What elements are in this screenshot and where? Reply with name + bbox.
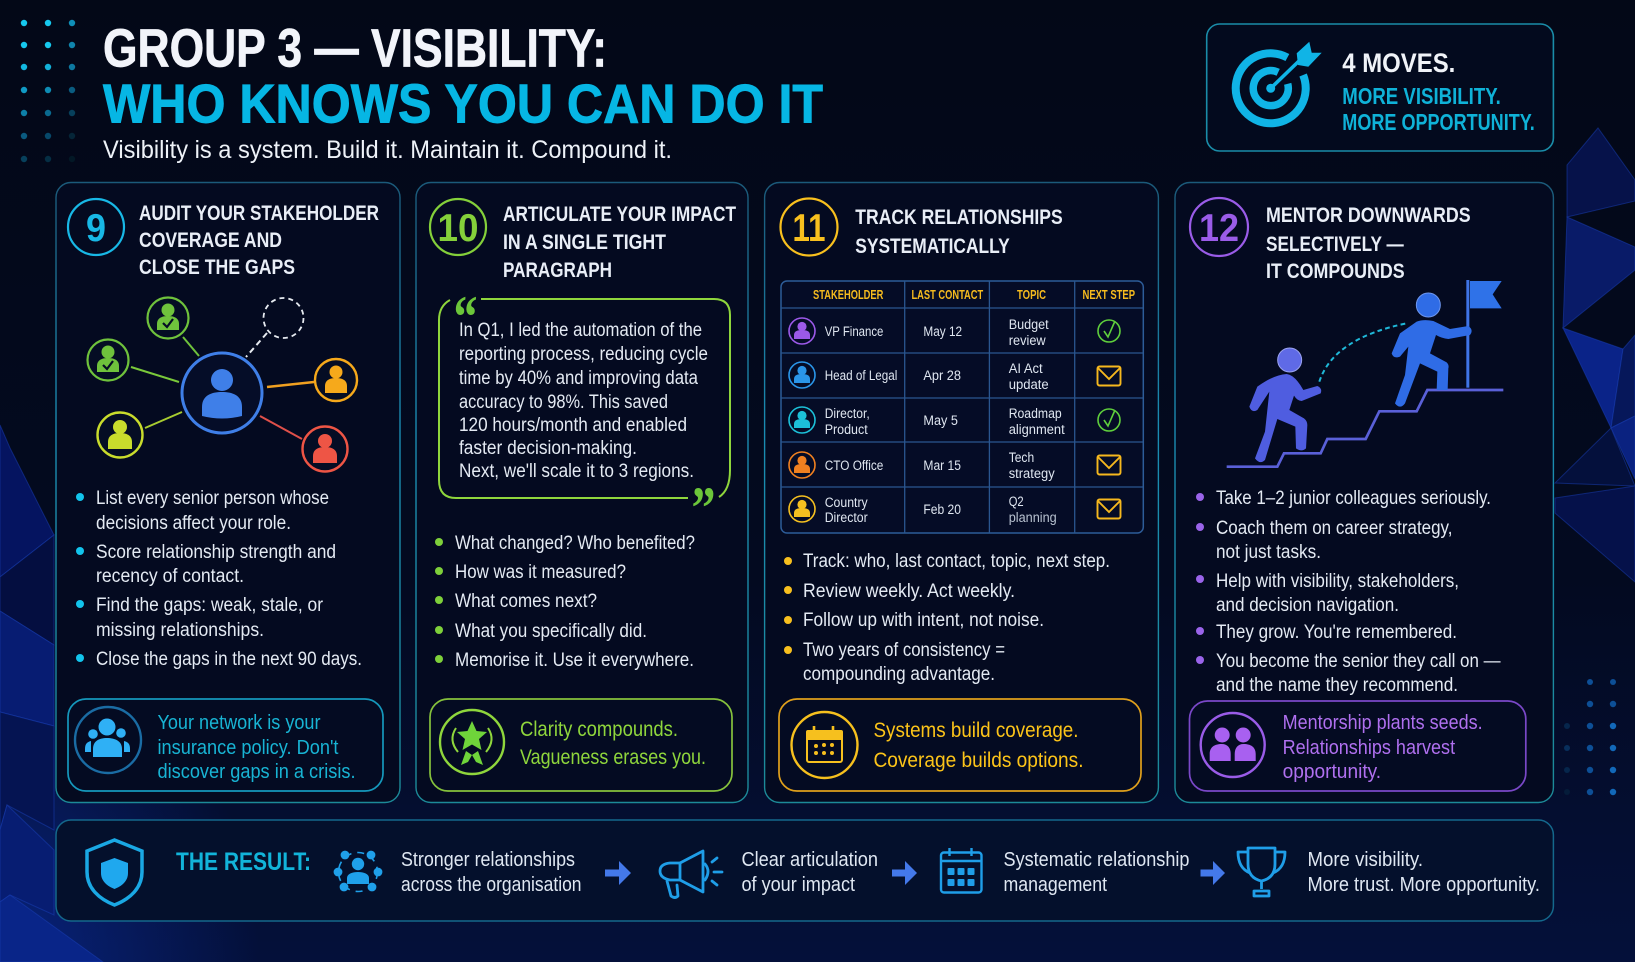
row: Director, Product: Product: [825, 422, 868, 437]
number badge 9: 9: [86, 207, 106, 250]
heading: [139, 202, 379, 279]
bullets: What you specifically did.: [455, 621, 647, 642]
bullets: What comes next?: [455, 591, 597, 612]
number badge 10: 10: [438, 207, 478, 250]
callout: 4 moves: MORE OPPORTUNITY.: [1342, 109, 1535, 135]
row: CTO Office: Tech: [1009, 450, 1034, 465]
subtitle: Visibility is a system. Build it. Maintain it. Compound it.: [103, 136, 672, 164]
row: Head of Legal: update: [1009, 377, 1049, 392]
opening quote mark: “: [454, 284, 478, 350]
icon: target with arrow: [1236, 42, 1322, 123]
icon: people: [75, 707, 141, 773]
stakeholder yellow: [98, 412, 142, 458]
stakeholder orange: [315, 359, 357, 401]
quote box: In Q1, I led the automation of the: [459, 320, 702, 341]
row: CTO Office: CTO Office: [825, 458, 883, 473]
row: VP Finance: VP Finance: [825, 324, 883, 339]
bullets: decisions affect your role.: [96, 513, 291, 534]
callout: mentorship: [1190, 701, 1526, 791]
heading: AUDIT YOUR STAKEHOLDER: [139, 202, 379, 225]
row: Director, Product: [789, 406, 1120, 437]
heading: CLOSE THE GAPS: [139, 256, 295, 279]
row: Country Director: Q2: [1009, 494, 1024, 509]
panel: move 11 track relationships: [765, 182, 1158, 802]
stairs: [1227, 390, 1503, 467]
stakeholder red: [302, 426, 348, 472]
junior figure: [1249, 348, 1321, 462]
table: relationship tracker: [781, 281, 1143, 533]
heading: IT COMPOUNDS: [1266, 260, 1405, 283]
row: Director, Product: Director,: [825, 406, 870, 421]
table header: LAST CONTACT: [912, 288, 983, 302]
row: Country Director: Director: [825, 510, 868, 525]
callout: 4 moves: 4 MOVES.: [1342, 48, 1455, 78]
callout: clarity: Vagueness erases you.: [520, 746, 706, 769]
bullets: What changed? Who benefited?: [455, 533, 695, 554]
heading: [503, 203, 736, 282]
quote box: time by 40% and improving data: [459, 368, 698, 389]
central person: [182, 353, 262, 433]
bullets: Score relationship strength and: [96, 542, 336, 563]
result text: management: Systematic relationship: [1004, 849, 1190, 871]
title: GROUP 3 — VISIBILITY:: [103, 18, 607, 78]
bullets: Memorise it. Use it everywhere.: [455, 650, 694, 671]
callout: systems: [779, 699, 1141, 791]
table header: STAKEHOLDER: [813, 288, 883, 302]
bullets: recency of contact.: [96, 566, 244, 587]
row: Country Director: [789, 494, 1120, 525]
number badge 12: 12: [1199, 207, 1239, 250]
quote box: faster decision-making.: [459, 438, 637, 459]
heading: MENTOR DOWNWARDS: [1266, 204, 1471, 227]
icon: two people: [1201, 713, 1265, 777]
senior figure: [1392, 293, 1472, 407]
bullets: Help with visibility, stakeholders,: [1216, 571, 1459, 592]
callout: network insurance: insurance policy. Don't: [158, 736, 339, 759]
callout: clarity: [430, 699, 732, 791]
heading: IN A SINGLE TIGHT: [503, 231, 666, 254]
result text: management: [1004, 849, 1190, 896]
arrow 3: [1200, 861, 1225, 885]
closing quote mark: ”: [692, 475, 716, 541]
icon: people network: [334, 851, 382, 892]
title: WHO KNOWS YOU CAN DO IT: [103, 72, 823, 134]
row: VP Finance: Budget: [1009, 317, 1049, 332]
row: VP Finance: May 12: [923, 324, 962, 339]
icon: trophy: [1238, 848, 1285, 896]
row: Head of Legal: Head of Legal: [825, 368, 897, 383]
quote box: accuracy to 98%. This saved: [459, 392, 668, 413]
result text: articulation: [742, 849, 878, 896]
bullets: Review weekly. Act weekly.: [803, 581, 1015, 602]
title: [103, 18, 823, 134]
bullets: not just tasks.: [1216, 542, 1321, 563]
panel: move 10 impact paragraph: [416, 182, 748, 802]
bullets: Follow up with intent, not noise.: [803, 610, 1044, 631]
bullets: [1196, 488, 1500, 696]
bullets: How was it measured?: [455, 562, 626, 583]
row: CTO Office: [789, 450, 1120, 481]
bullets: Close the gaps in the next 90 days.: [96, 649, 362, 670]
dashed arc: [1319, 323, 1407, 382]
row: Head of Legal: [789, 361, 1120, 392]
icon: calendar: [941, 848, 982, 892]
bullets: List every senior person whose: [96, 488, 329, 509]
heading: PARAGRAPH: [503, 259, 612, 282]
missing stakeholder: [264, 298, 304, 338]
callout: network insurance: Your network is your: [158, 711, 321, 734]
bullets: compounding advantage.: [803, 664, 995, 685]
row: Director, Product: Roadmap: [1009, 406, 1062, 421]
callout: network insurance: discover gaps in a crisis.: [158, 760, 356, 783]
panel: move 12 mentor downwards: [1175, 182, 1553, 802]
heading: ARTICULATE YOUR IMPACT: [503, 203, 736, 226]
result text: visibility: More visibility.: [1308, 849, 1423, 871]
flag: [1466, 280, 1502, 388]
quote box: 120 hours/month and enabled: [459, 415, 687, 436]
bullets: Two years of consistency =: [803, 640, 1005, 661]
quote box: [439, 284, 730, 541]
result text: articulation: Clear articulation: [742, 849, 878, 871]
row: Country Director: planning: [1009, 510, 1057, 525]
bullets: [435, 533, 695, 671]
result text: visibility: [1308, 849, 1540, 896]
result text: relationships: [401, 849, 582, 896]
callout: mentorship: opportunity.: [1283, 760, 1381, 783]
bullets: [76, 488, 362, 670]
result text: relationships: Stronger relationships: [401, 849, 575, 871]
row: VP Finance: review: [1009, 333, 1046, 348]
number badge 11: 11: [792, 207, 826, 250]
row: Director, Product: May 5: [923, 413, 958, 428]
panel: the result band: [56, 820, 1553, 921]
callout: network insurance: [68, 699, 383, 791]
heading: [855, 206, 1063, 258]
bullets: Coach them on career strategy,: [1216, 518, 1452, 539]
icon: shield: [87, 840, 142, 905]
icon: megaphone: [660, 851, 722, 898]
callout: mentorship: Mentorship plants seeds.: [1283, 711, 1483, 734]
row: Country Director: Feb 20: [923, 502, 961, 517]
bullets: Track: who, last contact, topic, next step.: [803, 551, 1110, 572]
stakeholder green 1: [148, 298, 188, 338]
bullets: Find the gaps: weak, stale, or: [96, 595, 324, 616]
bullets: Take 1–2 junior colleagues seriously.: [1216, 488, 1491, 509]
illustration: climbing stairs: [1227, 280, 1503, 467]
callout: systems: Systems build coverage.: [874, 719, 1078, 742]
heading: [1266, 204, 1471, 283]
row: CTO Office: Mar 15: [923, 458, 961, 473]
table header: [813, 288, 1135, 302]
number badge 9: [68, 199, 124, 255]
bullets: and the name they recommend.: [1216, 675, 1458, 696]
callout: 4 moves: MORE VISIBILITY.: [1342, 83, 1501, 109]
bullets: and decision navigation.: [1216, 595, 1399, 616]
bullets: They grow. You're remembered.: [1216, 622, 1457, 643]
heading: SELECTIVELY —: [1266, 233, 1404, 256]
callout: systems: Coverage builds options.: [874, 749, 1084, 772]
result label: THE RESULT:: [176, 848, 311, 876]
row: Head of Legal: Apr 28: [923, 368, 961, 383]
result text: management: management: [1004, 874, 1107, 896]
quote box: Next, we'll scale it to 3 regions.: [459, 461, 694, 482]
icon: award ribbon: [440, 710, 504, 774]
arrow 1: [605, 861, 631, 885]
result text: articulation: of your impact: [742, 874, 855, 896]
stakeholder green 2: [88, 340, 128, 380]
number badge 11: [780, 198, 838, 256]
bullets: missing relationships.: [96, 620, 264, 641]
number badge 12: [1190, 198, 1248, 256]
arrow 2: [892, 861, 917, 885]
heading: COVERAGE AND: [139, 229, 282, 252]
table header: TOPIC: [1017, 288, 1046, 302]
callout: 4 moves: [1207, 24, 1553, 151]
result text: relationships: across the organisation: [401, 874, 582, 896]
bullets: You become the senior they call on —: [1216, 651, 1500, 672]
panel: move 9 stakeholder coverage: [56, 182, 400, 802]
icon: calendar: [792, 712, 858, 778]
result text: visibility: More trust. More opportunity.: [1308, 874, 1540, 896]
row: Country Director: Country: [825, 495, 868, 510]
number badge 10: [430, 199, 486, 255]
callout: clarity: Clarity compounds.: [520, 718, 678, 741]
table header: NEXT STEP: [1082, 288, 1135, 302]
row: VP Finance: [789, 317, 1120, 348]
row: Head of Legal: AI Act: [1009, 361, 1043, 376]
row: CTO Office: strategy: [1009, 466, 1055, 481]
heading: TRACK RELATIONSHIPS: [855, 206, 1063, 229]
quote box: reporting process, reducing cycle: [459, 344, 708, 365]
network diagram: [88, 298, 357, 472]
callout: mentorship: Relationships harvest: [1283, 736, 1455, 759]
row: Director, Product: alignment: [1009, 422, 1065, 437]
heading: SYSTEMATICALLY: [855, 235, 1010, 258]
bullets: [784, 551, 1110, 685]
